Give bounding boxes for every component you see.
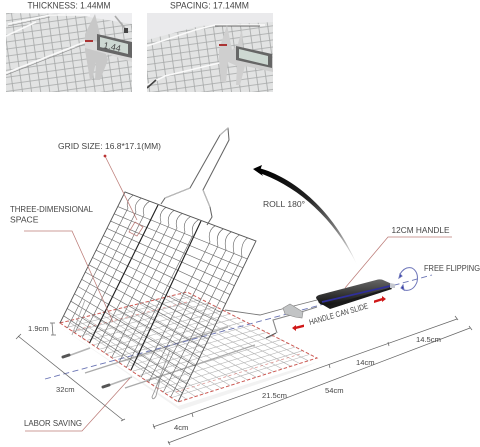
heading: spacing: SPACING: 17.14MM bbox=[170, 0, 249, 10]
diagram: grill basket bbox=[45, 128, 432, 410]
foot left bbox=[68, 348, 90, 356]
label: grid size: GRID SIZE: 16.8*17.1(MM) bbox=[58, 141, 161, 151]
black handle bbox=[316, 279, 395, 309]
dimension labels: 21.5cm bbox=[262, 391, 287, 400]
upright grid cross wires bbox=[64, 207, 247, 393]
foot right bbox=[107, 377, 132, 386]
lower grid bbox=[67, 294, 310, 399]
dimension labels: 54cm bbox=[325, 386, 344, 395]
dimension lines bbox=[16, 316, 472, 445]
upright grid long wires bbox=[67, 195, 248, 397]
photo: thickness caliper: 1.44 bbox=[103, 40, 122, 54]
heading: thickness: THICKNESS: 1.44MM bbox=[28, 0, 110, 10]
handle wires bbox=[225, 300, 317, 315]
blue centre line bbox=[45, 275, 432, 379]
lower grid thick wires bbox=[85, 327, 255, 388]
icon: free flipping rotation ring bbox=[399, 268, 417, 290]
photo: thickness caliper bbox=[6, 13, 132, 92]
dimension labels bbox=[28, 324, 441, 432]
dimension labels: 14.5cm bbox=[416, 335, 441, 344]
dark support wires bbox=[90, 205, 201, 370]
leader dot bbox=[104, 155, 106, 157]
label: handle can slide: HANDLE CAN SLIDE bbox=[308, 301, 369, 327]
upright grid frame bbox=[60, 192, 256, 402]
arrow: slide left bbox=[292, 324, 304, 331]
label: three-dimensional space: THREE-DIMENSIONAL bbox=[10, 204, 93, 214]
arrow: slide right bbox=[374, 296, 386, 303]
photo: spacing caliper bbox=[147, 13, 273, 92]
red leader lines bbox=[24, 156, 452, 431]
dimension labels: 14cm bbox=[356, 358, 375, 367]
dimension labels: 32cm bbox=[56, 385, 75, 394]
label: labor saving: LABOR SAVING bbox=[24, 418, 82, 428]
arrow: roll 180 bbox=[253, 165, 357, 265]
lower grid shadow bbox=[60, 327, 317, 410]
dimension labels: 1.9cm bbox=[28, 324, 49, 333]
label: handle length: 12CM HANDLE bbox=[392, 225, 450, 235]
label: roll: ROLL 180° bbox=[263, 199, 305, 209]
dimension labels: 4cm bbox=[174, 423, 188, 432]
grill handle loop bbox=[161, 128, 229, 225]
slider clamp bbox=[283, 304, 303, 318]
label: three-dimensional space: SPACE bbox=[10, 214, 39, 224]
red dashed outline bbox=[60, 292, 317, 402]
front clip bbox=[152, 350, 170, 399]
